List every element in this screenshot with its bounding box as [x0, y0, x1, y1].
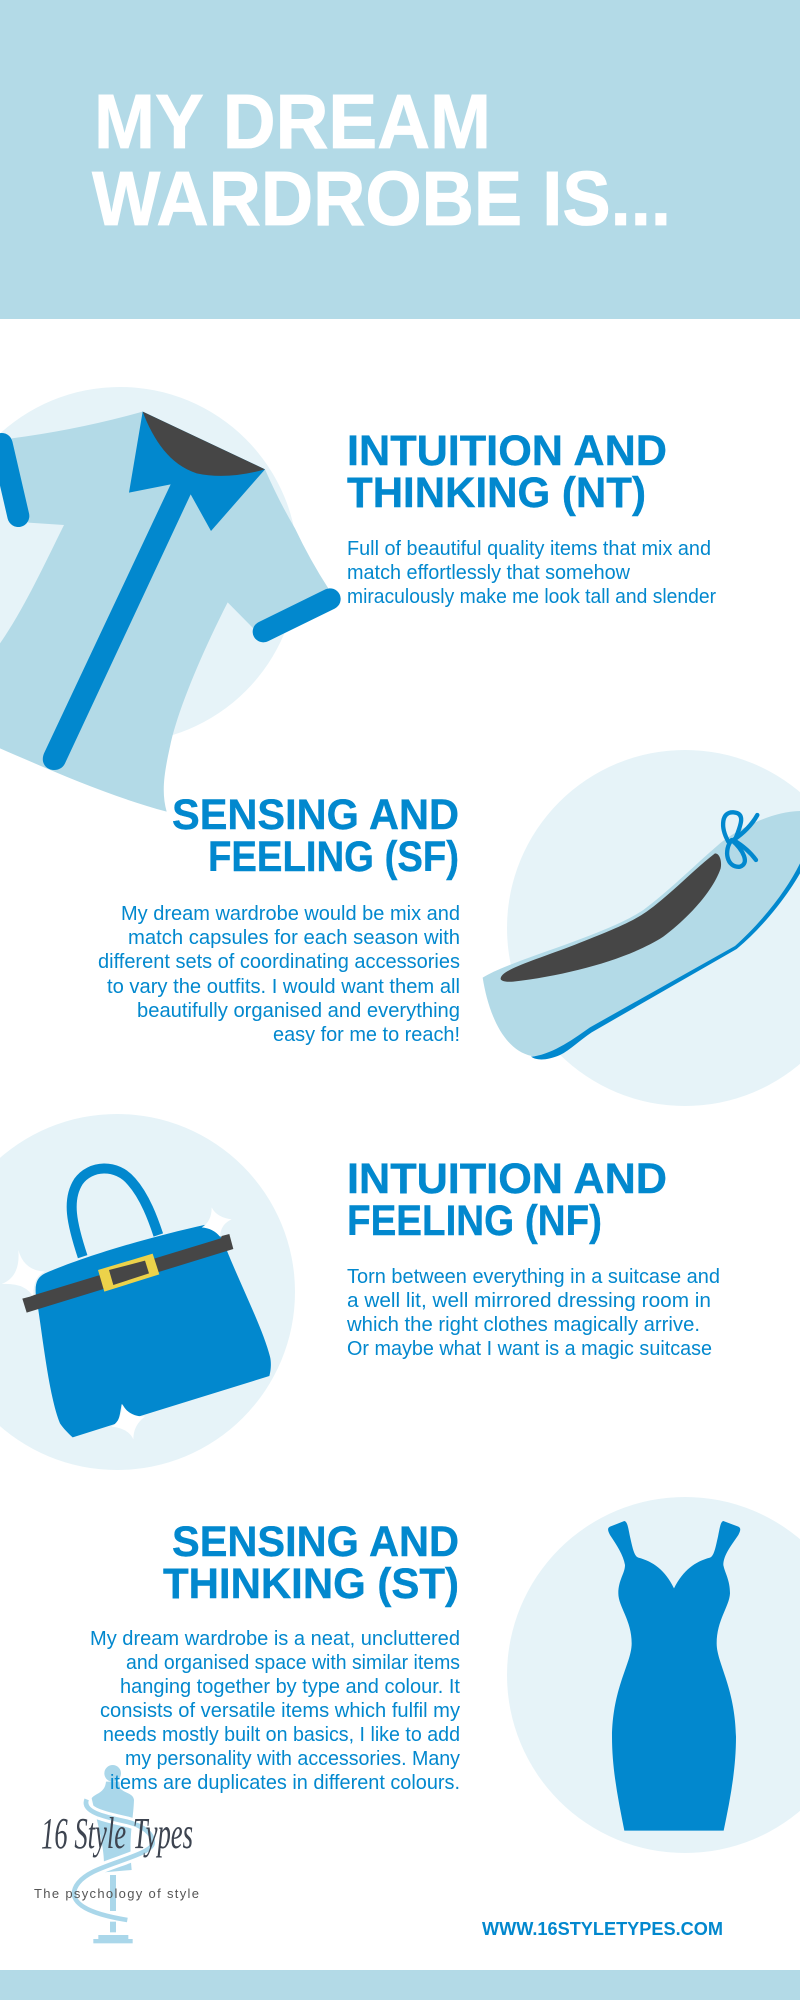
panel: sensing and feeling: [98, 750, 800, 1106]
heading: [163, 1518, 459, 1608]
heading: INTUITION AND: [347, 1155, 667, 1203]
background circle: [0, 1114, 295, 1470]
heading: FEELING (NF): [347, 1197, 602, 1245]
body text: which the right clothes magically arrive.: [346, 1313, 700, 1336]
logo text: [34, 1809, 199, 1901]
body text: match capsules for each season with: [128, 926, 460, 949]
heading: [172, 791, 459, 881]
body text: match effortlessly that somehow: [347, 561, 630, 584]
body text: and organised space with similar items: [126, 1651, 460, 1674]
body text: Full of beautiful quality items that mix and: [347, 537, 711, 560]
body text: different sets of coordinating accessories: [98, 950, 460, 973]
body text: Torn between everything in a suitcase and: [347, 1265, 720, 1288]
heading: THINKING (ST): [163, 1560, 459, 1608]
logo mannequin: [74, 1765, 153, 1943]
background circle: [507, 1497, 800, 1853]
background circle: [507, 750, 800, 1106]
heading: FEELING (SF): [208, 833, 459, 881]
body text: [90, 1627, 461, 1794]
title: WARDROBE IS...: [92, 156, 671, 242]
icon: ballet flat shoe: [483, 811, 800, 1059]
heading: INTUITION AND: [347, 427, 667, 475]
panel: intuition and thinking: [0, 387, 716, 812]
footer band: [0, 1970, 800, 2000]
logo text: 16 Style Types: [41, 1809, 193, 1858]
body text: [98, 902, 460, 1046]
body text: beautifully organised and everything: [137, 999, 460, 1022]
body text: my personality with accessories. Many: [125, 1747, 461, 1770]
icon: handbag: [2, 1169, 271, 1439]
body text: My dream wardrobe is a neat, uncluttered: [90, 1627, 460, 1650]
panel: sensing and thinking: [74, 1497, 800, 1943]
heading: SENSING AND: [172, 1518, 459, 1566]
body text: Or maybe what I want is a magic suitcase: [347, 1337, 712, 1360]
heading: [347, 1155, 667, 1245]
body text: [346, 1265, 720, 1360]
body text: [347, 537, 716, 608]
logo text: The psychology of style: [34, 1886, 199, 1901]
body text: consists of versatile items which fulfil my: [100, 1699, 461, 1722]
panel: intuition and feeling: [0, 1114, 720, 1470]
body text: to vary the outfits. I would want them all: [107, 975, 460, 998]
background circle: [0, 387, 298, 743]
title: [92, 79, 671, 242]
body text: hanging together by type and colour. It: [120, 1675, 460, 1698]
heading: SENSING AND: [172, 791, 459, 839]
body text: miraculously make me look tall and slender: [347, 585, 716, 608]
body text: needs mostly built on basics, I like to add: [103, 1723, 460, 1746]
body text: a well lit, well mirrored dressing room in: [347, 1289, 711, 1312]
title: MY DREAM: [94, 79, 491, 165]
heading: [347, 427, 667, 517]
heading: THINKING (NT): [347, 469, 646, 517]
website link: WWW.16STYLETYPES.COM: [482, 1918, 723, 1939]
icon: dress: [608, 1521, 740, 1831]
icon: shirt: [0, 412, 330, 812]
body text: items are duplicates in different colours.: [110, 1771, 460, 1794]
body text: easy for me to reach!: [273, 1023, 460, 1046]
body text: My dream wardrobe would be mix and: [121, 902, 460, 925]
header band with title: [0, 0, 800, 319]
